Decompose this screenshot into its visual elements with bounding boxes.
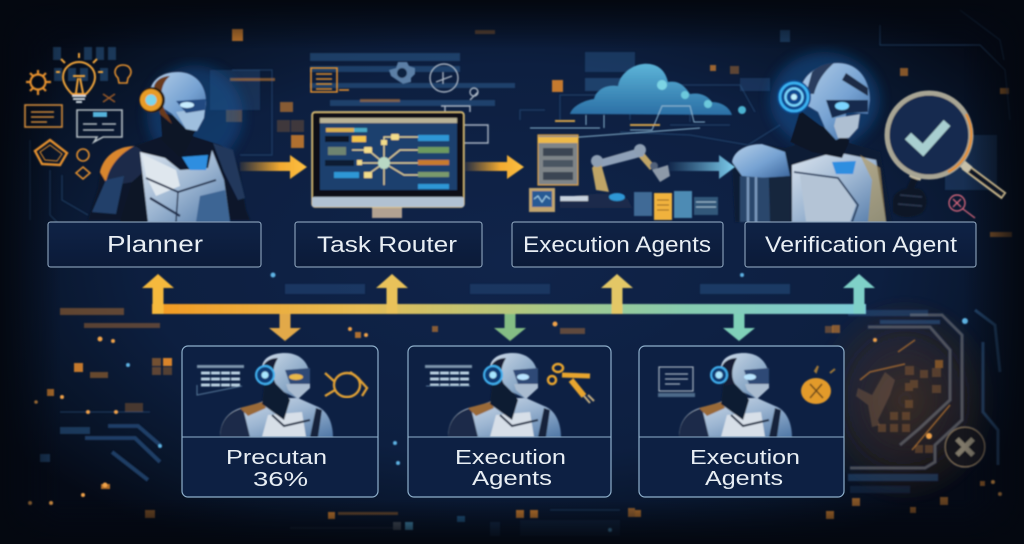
box: task router	[295, 222, 482, 267]
icon: server	[538, 135, 578, 185]
icon: orange circuit ring	[325, 372, 367, 397]
icon: task router gear	[389, 62, 415, 84]
icon: task router compass	[430, 64, 488, 143]
robot: planner	[88, 65, 250, 222]
icon: small rejected magnifier	[949, 195, 975, 218]
icon: pentagon	[35, 140, 67, 165]
icon: diamond node	[76, 167, 90, 179]
arrow: router to execution	[465, 155, 524, 179]
mini robot	[220, 353, 333, 437]
icon: small screen	[529, 188, 555, 212]
panel: execution agents two: Execution	[690, 447, 800, 469]
box: task router: Task Router	[317, 232, 457, 257]
icon: magnifier with check	[887, 93, 1004, 217]
panel: execution agents two: Agents	[705, 468, 783, 490]
panel: execution agents two	[639, 346, 844, 497]
arrow: down to panel three	[723, 314, 755, 341]
panel: execution agents one	[408, 346, 611, 497]
icon: orange robot arm	[548, 364, 594, 403]
icon: clipboard	[658, 367, 695, 397]
icon: small cross	[103, 94, 115, 102]
panel: precutan: 36%	[253, 469, 308, 491]
feedback bus with arrows	[142, 274, 875, 341]
arrow: up to execution agents	[601, 274, 633, 314]
icon: chat note	[77, 110, 122, 142]
robot: verification agent	[732, 52, 892, 222]
icon: table	[197, 365, 244, 395]
box: planner: Planner	[107, 231, 203, 257]
icon: faint claw	[856, 372, 895, 427]
arrow: planner to router	[240, 155, 307, 179]
icon: robot arm	[592, 148, 655, 192]
panel: execution agents one: Execution	[455, 447, 566, 469]
arrow: up to task router	[376, 274, 408, 314]
icon: table	[425, 365, 472, 386]
icon: faint x circle	[945, 427, 985, 467]
mini robot	[679, 353, 792, 437]
icon: orange coin	[801, 366, 835, 404]
mini robot	[448, 353, 561, 437]
panel: precutan: Precutan	[226, 447, 327, 469]
box: execution agents: Execution Agents	[523, 232, 711, 257]
panel: planner icons	[25, 53, 131, 179]
box: verification agent: Verification Agent	[765, 232, 957, 257]
icon: small bulb	[115, 65, 131, 83]
arrow: execution to verification	[669, 155, 735, 179]
box: planner	[48, 222, 261, 267]
icon: lightbulb	[56, 53, 103, 102]
execution agents equipment	[529, 135, 718, 220]
arrow: up to verification agent	[843, 274, 875, 314]
icon: small cog	[77, 149, 89, 161]
box: verification agent	[745, 222, 976, 267]
box: execution agents	[512, 222, 723, 267]
icon: cloud	[530, 64, 746, 140]
icon: file stack	[634, 192, 652, 216]
arrow: down to panel one	[269, 314, 301, 341]
arrow: up to planner	[142, 274, 174, 314]
warm panel right	[878, 366, 941, 453]
monitor: task router	[312, 112, 464, 218]
icon: task router document	[311, 68, 349, 92]
icon: gear	[26, 70, 51, 95]
panel: execution agents one: Agents	[472, 468, 552, 490]
icon: document	[25, 105, 62, 127]
arrow: down to panel two	[494, 314, 526, 341]
panel: precutan	[182, 346, 378, 497]
